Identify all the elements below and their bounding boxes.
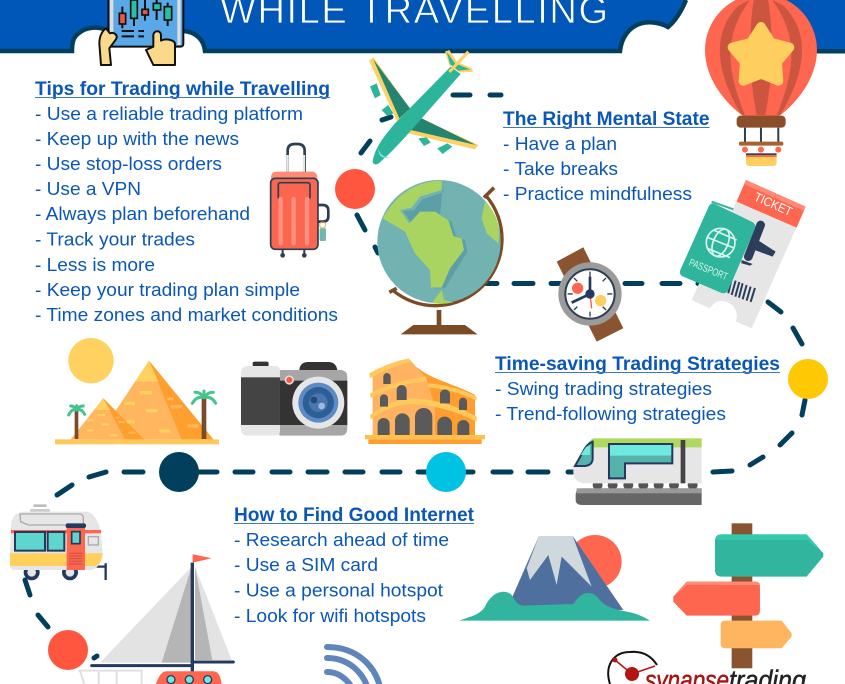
dashed route bbox=[25, 95, 805, 658]
route node: navy bbox=[159, 452, 199, 492]
icon: passport and ticket bbox=[680, 180, 806, 328]
text block: good internet: - Use a personal hotspot bbox=[234, 580, 444, 600]
icon: train bbox=[573, 438, 702, 505]
route node: cyan bbox=[426, 452, 466, 492]
text block: tips for trading: - Time zones and market conditions bbox=[35, 304, 338, 325]
text block: tips for trading: - Track your trades bbox=[35, 228, 195, 250]
icon: luggage bbox=[271, 144, 328, 258]
heading: mental state: The Right Mental State bbox=[503, 109, 710, 130]
icon: sailboat bbox=[79, 554, 233, 684]
text block: tips for trading: - Keep up with the news bbox=[35, 128, 239, 149]
text block: tips for trading: - Always plan beforehand bbox=[35, 203, 250, 224]
heading: tips: Tips for Trading while Travelling bbox=[35, 79, 330, 100]
icon: hot air balloon bbox=[705, 0, 817, 166]
text block: tips for trading: - Use a reliable trading platform bbox=[35, 103, 303, 124]
route node: red bottom bbox=[48, 630, 88, 670]
logo bbox=[608, 652, 806, 684]
route node: yellow bbox=[788, 359, 828, 399]
icon: airplane bbox=[369, 50, 478, 164]
text block: tips for trading: - Use a VPN bbox=[35, 178, 141, 199]
heading: strategies: Time-saving Trading Strategies bbox=[495, 354, 780, 375]
icon: watch bbox=[557, 247, 623, 342]
text block: good internet bbox=[234, 505, 475, 626]
icon: caravan bbox=[10, 504, 107, 580]
icon: signpost bbox=[673, 523, 823, 668]
text block: good internet: - Look for wifi hotspots bbox=[234, 605, 426, 626]
text block: tips for trading: - Less is more bbox=[35, 254, 155, 275]
text block: time-saving strategies: - Swing trading strategies bbox=[495, 378, 712, 399]
text block: good internet: - Use a SIM card bbox=[234, 554, 378, 575]
icon: globe bbox=[377, 180, 502, 334]
text block: tips for trading: - Use stop-loss orders bbox=[35, 153, 222, 174]
text block: time-saving strategies: - Trend-following strategies bbox=[495, 403, 726, 424]
text block: tips for trading: - Keep your trading plan simple bbox=[35, 279, 300, 300]
route node: red top bbox=[335, 169, 375, 209]
icon: tablet with candlestick chart bbox=[99, 0, 183, 65]
icon: wifi bbox=[327, 647, 382, 684]
text block: good internet: - Research ahead of time bbox=[234, 529, 449, 550]
text block: right mental state: - Have a plan bbox=[503, 133, 617, 154]
icon: passport and ticket: TICKET bbox=[752, 190, 795, 219]
icon: pyramids bbox=[55, 338, 219, 444]
text block: right mental state: - Practice mindfulness bbox=[503, 183, 692, 204]
text block: time-saving strategies bbox=[495, 354, 780, 424]
icon: mount fuji bbox=[459, 535, 650, 621]
heading: internet: How to Find Good Internet bbox=[234, 505, 475, 526]
icon: camera bbox=[241, 362, 347, 436]
text block: tips for trading bbox=[35, 79, 338, 325]
header banner bbox=[0, 0, 845, 54]
text block: right mental state: - Take breaks bbox=[503, 158, 618, 179]
icon: colosseum bbox=[365, 358, 485, 444]
text block: right mental state bbox=[503, 109, 710, 204]
icon: passport and ticket: PASSPORT bbox=[687, 258, 729, 283]
